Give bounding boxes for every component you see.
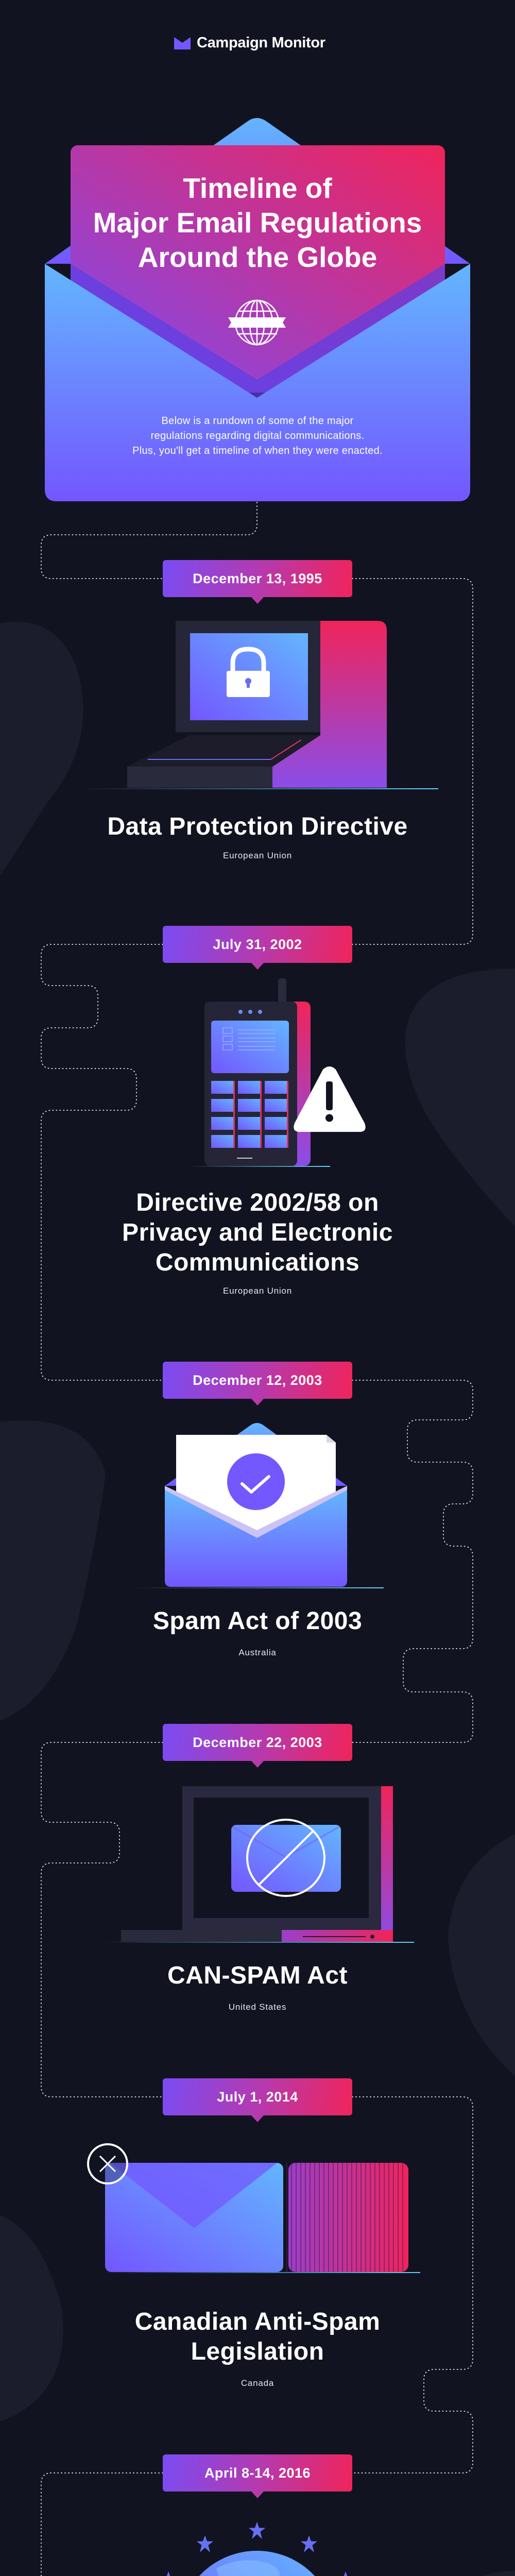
intro text: regulations regarding digital communications. [151,430,364,442]
logo top: Campaign Monitor [197,35,325,51]
region: European Union: European Union [223,851,292,860]
heading: Directive 2002/58: Privacy and Electronic [122,1219,393,1246]
heading: CAN-SPAM Act: CAN-SPAM Act [167,1962,348,1989]
heading: Spam Act of 2003: Spam Act of 2003 [153,1607,362,1635]
badge: December 22, 2003 [163,1724,352,1761]
badge: December 13, 1995 [163,560,352,597]
icon: monitor with blocked email [102,1786,414,1943]
icon: warning triangle [294,1066,366,1132]
icon: laptop with lock [79,621,438,789]
title [93,172,422,273]
badge: December 13, 1995: December 13, 1995 [193,571,322,586]
heading: Canadian Anti-Spam Legislation: Legislation [191,2338,324,2365]
heading: Data Protection Directive: Data Protection Directive [107,813,408,840]
badge: December 22, 2003: December 22, 2003 [193,1735,322,1750]
heading: Directive 2002/58 [122,1189,393,1276]
title: Timeline of [183,172,332,204]
heading: Canadian Anti-Spam Legislation [135,2308,380,2365]
badge: April 8-14, 2016 [163,2454,352,2492]
badge: July 1, 2014: July 1, 2014 [217,2089,298,2105]
icon: phone with warning [187,978,366,1167]
region: European Union 2: European Union [223,1286,292,1296]
badge: July 1, 2014 [163,2078,352,2115]
badge: July 31, 2002: July 31, 2002 [213,937,302,952]
badge: December 12, 2003 [163,1362,352,1399]
title: Around the Globe [138,241,377,273]
icon: globe [228,300,286,345]
intro text: Plus, you'll get a timeline of when they were enacted. [132,445,383,456]
heading: Canadian Anti-Spam Legislation: Canadian Anti-Spam [135,2308,380,2335]
badge: December 12, 2003: December 12, 2003 [193,1372,322,1388]
region: Australia: Australia [238,1648,277,1657]
header envelope [45,118,470,501]
heading: Directive 2002/58: Directive 2002/58 on [136,1189,379,1216]
intro text [132,415,383,456]
intro text: Below is a rundown of some of the major [162,415,353,427]
icon: envelope with check [131,1423,384,1588]
icon: envelope stack with x [88,2144,420,2273]
title: Major Email Regulations [93,207,422,239]
badge: July 31, 2002 [163,926,352,963]
heading: Directive 2002/58: Communications [156,1249,359,1276]
icon: GDPR globe with stars [148,2522,366,2576]
region: Canada: Canada [241,2378,274,2388]
region: United States: United States [229,2002,286,2012]
badge: April 8-14, 2016: April 8-14, 2016 [204,2465,311,2481]
